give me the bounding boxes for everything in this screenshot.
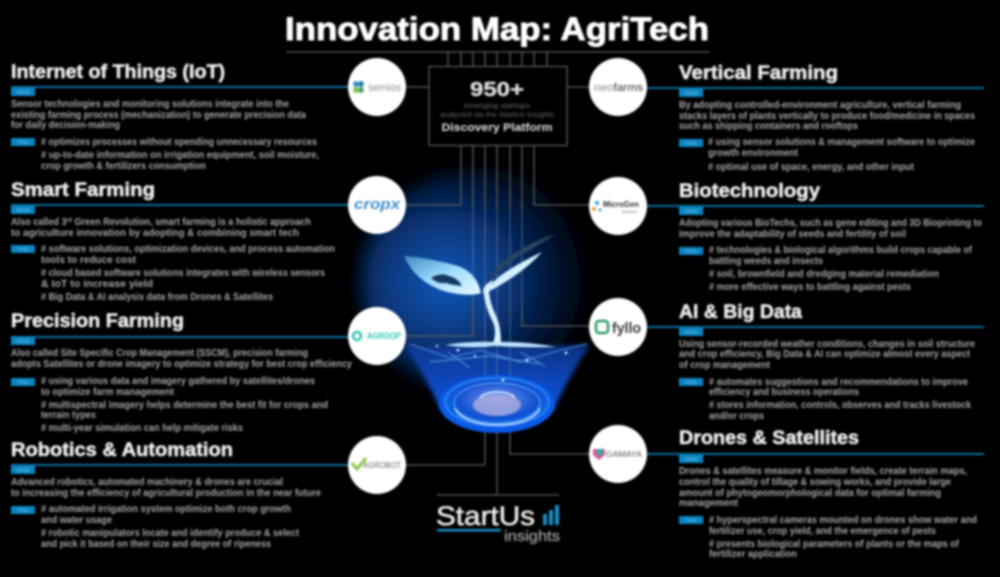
stem: [483, 280, 501, 343]
rule: [11, 336, 350, 338]
how list: battling weeds and insects: [709, 256, 823, 267]
how list: # software solutions, optimization devices, and process automation: [41, 244, 335, 255]
what tag: [679, 328, 703, 336]
tagline: insights: [504, 528, 560, 545]
rule: [647, 87, 984, 89]
bar icon: [543, 505, 559, 525]
how list: and/or crops: [709, 411, 764, 422]
how tag: [11, 245, 35, 253]
heading: AI & Big Data: [679, 302, 802, 323]
logo: MicroGen: [589, 177, 647, 235]
how list: # robotic manipulators locate and identify produce & select: [41, 528, 300, 539]
how list: [709, 245, 973, 293]
logo: Agroop: [348, 307, 406, 365]
sparkle points: [436, 345, 568, 382]
what tag: [679, 207, 703, 215]
how tag: [11, 506, 35, 514]
platform name: Discovery Platform: [442, 122, 553, 134]
rule: [11, 86, 350, 88]
rule: [647, 453, 984, 455]
heading: Biotechnology: [679, 181, 820, 202]
description: Drones & satellites measure & monitor fields, create terrain maps,: [679, 466, 967, 477]
panel: Smart Farming: [11, 180, 350, 303]
heading: Smart Farming: [11, 180, 155, 201]
how list: crop growth & fertilizers consumption: [41, 161, 206, 172]
how tag: [679, 378, 703, 386]
how list: # Big Data & AI analysis data from Drones & Satellites: [41, 292, 273, 303]
how tag: [11, 138, 35, 146]
title: Innovation Map: AgriTech: [285, 11, 709, 47]
how list: & IoT to increase yield: [41, 279, 153, 290]
what tag: what: [684, 457, 698, 463]
what tag: [11, 206, 35, 214]
panel: Robotics and Automation: [11, 440, 350, 550]
how tag: how: [17, 140, 29, 146]
description: [679, 100, 975, 132]
description: By adopting controlled-environment agriculture, vertical farming: [679, 100, 961, 111]
what tag: what: [684, 330, 698, 336]
description: [11, 348, 352, 370]
how tag: [679, 247, 703, 255]
what tag: what: [16, 339, 30, 345]
what tag: [11, 337, 35, 345]
how list: tools to reduce cost: [41, 255, 137, 266]
how list: [709, 515, 977, 560]
what tag: [11, 466, 35, 474]
how list: efficiency and business operations: [709, 387, 859, 398]
panel: Drones and Satellites: [647, 428, 984, 560]
how list: and water usage: [41, 515, 112, 526]
logo: neofarms: [589, 58, 647, 116]
how list: [41, 244, 335, 303]
heading: Drones & Satellites: [679, 428, 859, 449]
logo: cropx: [348, 176, 406, 234]
underline: [437, 529, 501, 532]
description: [11, 99, 306, 131]
how list: [708, 137, 975, 173]
how list: # automates suggestions and recommendations to improve: [709, 377, 968, 388]
how list: # soil, brownfield and dredging material remediation: [709, 269, 939, 280]
panel: Precision Farming: [11, 311, 352, 434]
logo: neofarms: neofarms: [594, 82, 644, 94]
how list: and pick it based on their size and degree of ripeness: [41, 539, 271, 550]
how list: terrain types: [41, 410, 96, 421]
what tag: what: [684, 91, 698, 97]
how list: # using sensor solutions & management software to optimize: [708, 137, 975, 148]
how list: # using various data and imagery gathered by satellites/drones: [41, 376, 315, 387]
how tag: [679, 139, 703, 147]
logo: MicroGen: MicroGen: [603, 200, 639, 209]
panel: Biotechnology: [647, 181, 984, 293]
logo: Agrobot: [348, 436, 406, 494]
how list: [709, 377, 971, 422]
description: of crop management: [679, 360, 771, 371]
soil surface: [445, 342, 556, 347]
rule: [647, 326, 984, 328]
description: management: [679, 498, 739, 509]
heading: Internet of Things (IoT): [11, 62, 225, 83]
description: [679, 339, 975, 371]
how list: # more effective ways to battling against pests: [709, 282, 911, 293]
funnel of light: [404, 345, 590, 410]
logo: fyllo: [589, 298, 647, 356]
how list: growth environment: [708, 148, 799, 159]
description: Also called Site Specific Crop Management (SSCM), precision farming: [11, 348, 308, 359]
central illustration: glowing plant: [360, 150, 596, 440]
connector lines: [286, 52, 710, 495]
holographic disc: [439, 375, 555, 433]
logo: fyllo: fyllo: [612, 320, 641, 337]
how tag: how: [17, 508, 29, 514]
how list: # multi-year simulation can help mitigate risks: [41, 423, 243, 434]
description: control the quality of tillage & sowing works, and provide large: [679, 477, 951, 488]
right leaf: [488, 234, 556, 284]
description: to increasing the efficiency of agricultural production in the near future: [11, 488, 321, 499]
description: for daily decision-making: [11, 120, 120, 131]
description: [679, 466, 967, 509]
what tag: what: [16, 90, 30, 96]
how list: # automated irrigation system optimize both crop growth: [41, 504, 291, 515]
how tag: how: [685, 141, 697, 147]
description: stacks layers of plants vertically to produce food/medicine in spaces: [679, 111, 975, 122]
blue glow: [360, 170, 596, 394]
description: Advanced robotics, automated machinery & drones are crucial: [11, 477, 283, 488]
stat number: 950+: [470, 79, 524, 101]
rule: [11, 204, 350, 206]
how tag: how: [685, 518, 697, 524]
how tag: [11, 378, 35, 386]
panel: AI and Big Data: [647, 302, 984, 422]
heading: Precision Farming: [11, 311, 184, 332]
what tag: [679, 89, 703, 97]
how list: # multispectral imagery helps determine the best fit for crops and: [41, 400, 328, 411]
how list: # up-to-date information on irrigation equipment, soil moisture,: [41, 150, 319, 161]
how list: # optimizes processes without spending unnecessary resources: [41, 137, 317, 148]
how list: fertilizer use, crop yield, and the emergence of pests: [709, 526, 936, 537]
how tag: how: [17, 247, 29, 253]
description: such as shipping containers and rooftops: [679, 121, 858, 132]
description: [679, 218, 982, 240]
description: [11, 217, 311, 239]
logo: semios: semios: [368, 82, 401, 94]
description: Using sensor-recorded weather conditions, changes in soil structure: [679, 339, 975, 350]
how list: # cloud based software solutions integrates with wireless sensors: [41, 268, 325, 279]
how tag: how: [17, 380, 29, 386]
what tag: [679, 455, 703, 463]
panel: Internet of Things: [11, 62, 350, 172]
wordmark: StartUs: [436, 501, 535, 531]
stat caption line 2: analyzed via the StartUs Insights: [440, 112, 555, 119]
logo: Gamaya: GAMAYA: [606, 450, 643, 459]
logo: MicroGen: Biotech: [622, 209, 637, 214]
how tag: [679, 516, 703, 524]
how list: to optimize farm management: [41, 387, 175, 398]
description: rd: [66, 218, 72, 224]
rule: [11, 464, 350, 466]
heading: Robotics & Automation: [11, 440, 233, 461]
description: Sensor technologies and monitoring solutions integrate into the: [11, 99, 289, 110]
description: [11, 477, 321, 499]
logo: cropx: cropx: [354, 196, 401, 213]
how list: [41, 504, 300, 550]
what tag: what: [16, 468, 30, 474]
logo: Agroop: AGROOP: [367, 331, 401, 341]
rule: [647, 205, 984, 207]
description: existing farming process (mechanization) to generate precision data: [11, 110, 306, 121]
brand logo: StartUs insights: [436, 501, 560, 545]
how list: # optimal use of space, energy, and other input: [708, 162, 915, 173]
logo: semios: [348, 58, 406, 116]
how list: # hyperspectral cameras mounted on drones show water and: [709, 515, 977, 526]
center box: 950+ startups: [429, 66, 567, 146]
description: Also called 3: [11, 217, 72, 228]
how list: # stores information, controls, observes and tracks livestock: [709, 400, 971, 411]
connector lines through glow: [473, 150, 522, 440]
how list: fertilizer application: [709, 549, 797, 560]
how list: # technologies & biological algorithms build crops capable of: [709, 245, 973, 256]
how tag: how: [685, 249, 697, 255]
description: amount of phytogeomorphological data for optimal farming: [679, 488, 941, 499]
how tag: how: [685, 380, 697, 386]
what tag: [11, 88, 35, 96]
description: adopts Satellites or drone imagery to optimize strategy for best crop efficiency: [11, 359, 352, 370]
how list: [41, 376, 328, 434]
panel: Vertical Farming: [647, 63, 984, 173]
description: to agriculture innovation by adopting & combining smart tech: [11, 228, 299, 239]
description: improve the adaptability of seeds and fertility of soil: [679, 229, 906, 240]
left leaf: [404, 256, 481, 295]
logo: Agrobot: AGROBOT: [363, 461, 401, 470]
what tag: what: [684, 209, 698, 215]
heading: Vertical Farming: [679, 63, 838, 84]
logo: Gamaya: [589, 425, 647, 483]
stat caption: emerging startups: [464, 103, 531, 110]
description: Green Revolution, smart farming is a holistic approach: [72, 217, 311, 228]
description: and crop efficiency, Big Data & AI can optimize almost every aspect: [679, 349, 971, 360]
how list: # presents biological parameters of plants or the maps of: [709, 539, 960, 550]
what tag: what: [16, 208, 30, 214]
how list: [41, 137, 319, 172]
